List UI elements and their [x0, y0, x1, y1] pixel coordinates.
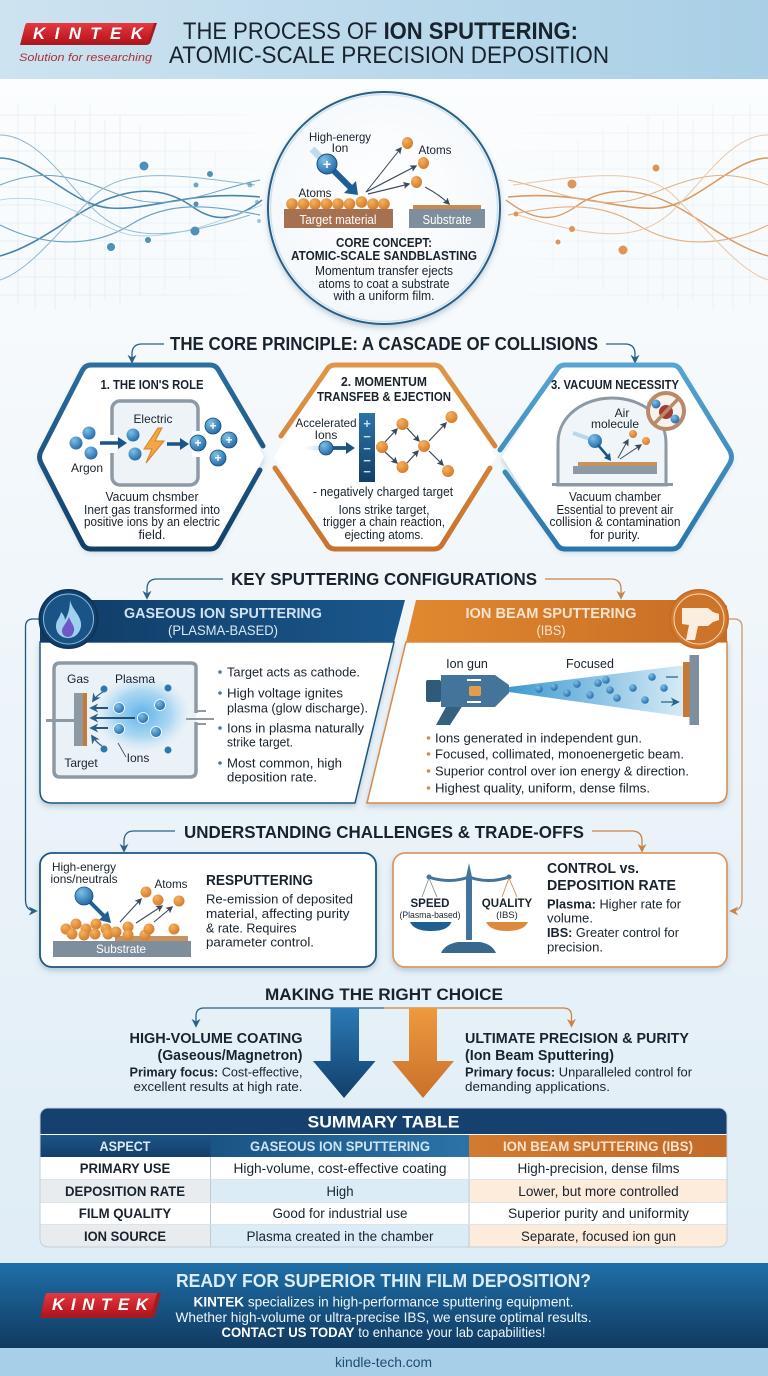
table row: primary use: High-volume, cost-effective coating	[234, 1161, 446, 1176]
list: gaseous features: Most common, high	[227, 756, 342, 770]
table column headers: GASEOUS ION SPUTTERING	[250, 1138, 430, 1154]
table row: primary use: PRIMARY USE	[80, 1161, 170, 1176]
website bar	[0, 1348, 768, 1376]
list: gaseous features	[218, 664, 368, 784]
logo: KINTEK footer: KINTEK	[52, 1295, 150, 1314]
footer call to action	[0, 1263, 768, 1348]
table row: deposition rate: DEPOSITION RATE	[65, 1184, 185, 1199]
arrow: choice left branch	[196, 1008, 384, 1026]
header band: gaseous: (PLASMA-BASED)	[168, 623, 278, 638]
text: high-volume coating: Primary focus: Cost-effective,	[130, 1064, 302, 1080]
icon: balance scale: (IBS)	[496, 910, 518, 921]
heading: control vs deposition rate: DEPOSITION RATE	[547, 878, 676, 894]
text: high-volume coating: HIGH-VOLUME COATING	[130, 1031, 302, 1047]
website bar: kindle-tech.com	[335, 1355, 432, 1370]
diagram: ionization chamber: +	[214, 451, 222, 465]
text: momentum body: Ions strike target,	[338, 503, 430, 517]
heading: momentum transfer	[317, 374, 451, 404]
panel: summary table	[40, 1108, 727, 1247]
diagram: collision cascade: +	[363, 416, 371, 431]
heading: core concept	[291, 235, 477, 263]
logo: KINTEK footer	[40, 1293, 161, 1318]
list: gaseous features: plasma (glow discharge).	[227, 700, 368, 716]
text: core concept body: with a uniform film.	[333, 289, 434, 303]
text: control body: Plasma: Higher rate for	[547, 896, 682, 912]
table row: ion source	[84, 1229, 676, 1244]
icon: balance scale: (Plasma-based)	[400, 910, 460, 921]
icon: balance scale: SPEED	[410, 898, 450, 910]
icon: ion gun	[670, 590, 728, 648]
text: control body: IBS: Greater control for	[547, 925, 680, 940]
text: resputtering body	[206, 892, 353, 950]
label: high-energy ion: Ion	[332, 141, 348, 155]
list: gaseous features: deposition rate.	[227, 770, 317, 784]
diagram: plasma chamber	[46, 663, 214, 777]
icon: high-energy ion arrow: +	[323, 156, 331, 172]
text: ion's role body: field.	[138, 528, 166, 542]
diagram: resputtering: ions/neutrals	[50, 872, 118, 886]
header band: gaseous: GASEOUS ION SPUTTERING	[124, 606, 322, 622]
heading: vacuum necessity: 3. VACUUM NECESSITY	[551, 377, 679, 392]
diagram: plasma chamber: Gas	[67, 672, 89, 686]
label: atoms left: Atoms	[298, 186, 332, 200]
table row: primary use	[80, 1161, 680, 1176]
text: call to action body: Whether high-volume or ultra-precise IBS, we ensure optimal results.	[176, 1309, 592, 1325]
target material block: Target material	[300, 213, 376, 227]
diagram: ion gun beam: Focused	[566, 657, 614, 671]
table row: deposition rate: High	[326, 1184, 354, 1199]
arrow: blue down	[313, 1008, 376, 1098]
diagram: collision cascade: Accelerated	[296, 416, 356, 430]
label: atoms right: Atoms	[418, 143, 452, 157]
heading: momentum transfer: 2. MOMENTUM	[341, 374, 427, 389]
table row: film quality: Good for industrial use	[272, 1206, 408, 1221]
arrow: challenges left	[124, 831, 175, 851]
heading: control vs deposition rate	[547, 861, 676, 894]
diagram: collision cascade: −	[363, 441, 371, 456]
text: ultimate precision and purity: demanding applications.	[465, 1079, 610, 1094]
table row: primary use: High-precision, dense films	[518, 1161, 680, 1176]
panel: gaseous ion sputtering	[40, 590, 405, 803]
text: vacuum necessity body: Vacuum chamber	[569, 490, 661, 504]
table column headers: ION BEAM SPUTTERING (IBS)	[503, 1138, 693, 1154]
text: resputtering body: parameter control.	[206, 934, 314, 950]
text: control body: precision.	[547, 940, 603, 954]
decorative waves and grid: left	[0, 105, 262, 310]
logo: KINTEK: KINTEK	[33, 24, 145, 43]
panel: vacuum necessity	[500, 365, 732, 549]
title: THE PROCESS OF ION SPUTTERING:	[183, 18, 578, 45]
heading: summary table: SUMMARY TABLE	[308, 1114, 460, 1132]
logo: KINTEK: Solution for researching	[19, 52, 153, 64]
text: negatively charged target: - negatively charged target	[313, 485, 453, 499]
diagram: collision cascade: Ions	[315, 428, 337, 442]
diagram: ionization chamber: +	[209, 419, 217, 433]
arrow: core principle left	[132, 344, 164, 362]
diagram: resputtering: High-energy	[52, 860, 116, 874]
text: ion's role body	[84, 490, 220, 542]
diagram: ionization chamber: Electric	[134, 412, 172, 426]
arrow: configurations right	[545, 579, 621, 598]
icon: high-energy ion arrow	[312, 149, 358, 195]
title	[169, 18, 609, 69]
heading: challenges and trade-offs: UNDERSTANDING CHALLENGES & TRADE-OFFS	[184, 822, 584, 842]
text: ion's role body: Vacuum chsmber	[106, 490, 198, 504]
text: core concept body: atoms to coat a substrate	[318, 277, 450, 291]
text: vacuum necessity body: Essential to prevent air	[556, 503, 674, 517]
label: high-energy ion: High-energy	[309, 130, 371, 144]
arrow: choice right branch	[384, 1008, 572, 1026]
text: momentum body: ejecting atoms.	[344, 528, 424, 542]
decorative waves and grid: right	[506, 105, 768, 310]
label: high-energy ion	[309, 130, 371, 155]
text: momentum body: trigger a chain reaction,	[323, 515, 445, 529]
text: ultimate precision and purity	[465, 1031, 693, 1094]
list: gaseous features: High voltage ignites	[227, 686, 344, 700]
diagram: ion gun beam: Ion gun	[446, 657, 488, 671]
icon: flame	[40, 590, 98, 648]
table column headers	[100, 1138, 693, 1154]
list: gaseous features: strike target.	[227, 734, 293, 750]
text: ultimate precision and purity: ULTIMATE PRECISION & PURITY	[465, 1031, 689, 1047]
header band: ion beam: (IBS)	[536, 623, 566, 638]
substrate block: Substrate	[422, 213, 472, 227]
heading: call to action: READY FOR SUPERIOR THIN FILM DEPOSITION?	[176, 1271, 591, 1291]
table row: deposition rate	[65, 1184, 679, 1199]
text: resputtering body: Re-emission of deposited	[206, 892, 353, 906]
heading: momentum transfer: TRANSFEB & EJECTION	[317, 389, 451, 404]
diagram: resputtering: Substrate	[96, 942, 146, 956]
table row: film quality: Superior purity and uniformity	[508, 1206, 689, 1221]
diagram: vacuum dome: Air	[615, 406, 629, 420]
list: ion beam features	[427, 730, 689, 796]
header band: ion beam	[406, 600, 727, 642]
text: vacuum necessity body: for purity.	[590, 528, 640, 542]
diagram: ion gun beam	[426, 655, 699, 725]
text: high-volume coating: (Gaseous/Magnetron)	[158, 1048, 303, 1064]
heading: ion's role: 1. THE ION'S ROLE	[100, 377, 204, 392]
diagram: collision cascade: −	[363, 453, 371, 468]
target material block	[284, 196, 393, 228]
text: ion's role body: positive ions by an electric	[84, 515, 220, 529]
logo: KINTEK	[19, 23, 157, 64]
diagram: plasma chamber: Target	[64, 756, 98, 770]
table row: ion source: Separate, focused ion gun	[521, 1229, 676, 1244]
arrow: configurations left	[147, 579, 223, 598]
text: control body: volume.	[547, 910, 593, 926]
icon: balance scale: QUALITY	[482, 898, 533, 910]
panel: control vs deposition rate	[393, 853, 727, 967]
heading: core concept: ATOMIC-SCALE SANDBLASTING	[291, 248, 477, 263]
text: control body	[547, 896, 682, 954]
diagram: resputtering: Atoms	[154, 877, 188, 891]
table row: ion source: ION SOURCE	[84, 1229, 166, 1244]
panel: the ion's role	[40, 365, 264, 549]
icon: ejected atoms	[366, 137, 449, 204]
text: ion's role body: Inert gas transformed into	[84, 503, 220, 517]
text: core concept body: Momentum transfer ejects	[315, 264, 453, 278]
heading: resputtering: RESPUTTERING	[206, 873, 313, 889]
text: call to action body: KINTEK specializes in high-performance sputtering equipment.	[194, 1294, 574, 1310]
diagram: ionization chamber: Argon	[71, 461, 103, 475]
text: call to action body	[176, 1294, 592, 1340]
table row: ion source: Plasma created in the chamber	[246, 1229, 434, 1244]
arrow: orange down	[392, 1008, 454, 1098]
heading: control vs deposition rate: CONTROL vs.	[547, 861, 639, 877]
arrow: right bracket to trade-offs	[729, 619, 742, 911]
table row: film quality: FILM QUALITY	[79, 1206, 171, 1221]
header band: gaseous	[40, 600, 405, 642]
header band: ion beam: ION BEAM SPUTTERING	[466, 606, 636, 622]
text: resputtering body: material, affecting purity	[206, 906, 350, 921]
icon: balance scale	[400, 863, 533, 953]
text: momentum body	[323, 503, 445, 542]
substrate block	[409, 205, 485, 228]
text: high-volume coating	[130, 1031, 303, 1094]
diagram: ionization chamber	[70, 401, 237, 485]
table row: deposition rate: Lower, but more controlled	[518, 1184, 679, 1199]
table row: film quality	[79, 1206, 689, 1221]
text: vacuum necessity body: collision & contamination	[550, 515, 681, 529]
list: gaseous features: Target acts as cathode.	[227, 664, 360, 680]
text: core concept body	[315, 264, 453, 303]
heading: key sputtering configurations: KEY SPUTTERING CONFIGURATIONS	[231, 569, 537, 589]
diagram: plasma chamber: Plasma	[115, 672, 155, 686]
panel: ion beam sputtering	[367, 590, 728, 803]
diagram: vacuum dome	[552, 398, 673, 486]
arrow: left bracket to resputtering	[26, 619, 40, 911]
text: ultimate precision and purity: (Ion Beam Sputtering)	[465, 1048, 614, 1064]
diagram: vacuum dome: molecule	[591, 417, 639, 431]
table column headers: ASPECT	[100, 1138, 151, 1154]
text: ultimate precision and purity: Primary focus: Unparalleled control for	[465, 1064, 693, 1080]
header band	[0, 0, 768, 79]
diagram: collision cascade: −	[363, 464, 371, 479]
panel: core concept circle	[268, 92, 500, 324]
arrow: challenges right	[592, 831, 642, 851]
diagram: collision cascade: −	[363, 429, 371, 444]
list: gaseous features: Ions in plasma naturally	[227, 720, 364, 736]
panel: momentum transfer and ejection	[274, 365, 496, 549]
list: ion beam features: Superior control over ion energy & direction.	[435, 764, 689, 778]
text: vacuum necessity body	[550, 490, 681, 542]
list: ion beam features: Highest quality, uniform, dense films.	[435, 780, 650, 796]
diagram: collision cascade	[296, 411, 458, 482]
icon: no air molecules	[648, 393, 684, 429]
diagram: plasma chamber: Ions	[127, 751, 149, 765]
title: ATOMIC-SCALE PRECISION DEPOSITION	[169, 42, 609, 69]
heading: core concept: CORE CONCEPT:	[336, 235, 432, 250]
diagram: resputtering	[50, 860, 191, 957]
panel: resputtering	[40, 853, 376, 967]
arrow: core principle right	[606, 344, 635, 362]
text: resputtering body: & rate. Requires	[206, 920, 297, 936]
list: ion beam features: Ions generated in independent gun.	[435, 730, 642, 746]
heading: core principle: THE CORE PRINCIPLE: A CASCADE OF COLLISIONS	[170, 334, 598, 354]
heading: making the right choice: MAKING THE RIGHT CHOICE	[265, 986, 503, 1004]
list: ion beam features: Focused, collimated, monoenergetic beam.	[435, 746, 684, 762]
text: high-volume coating: excellent results at high rate.	[134, 1079, 302, 1094]
text: call to action body: CONTACT US TODAY to enhance your lab capabilities!	[222, 1324, 546, 1340]
diagram: ionization chamber: +	[194, 436, 202, 450]
diagram: ionization chamber: +	[225, 433, 233, 447]
